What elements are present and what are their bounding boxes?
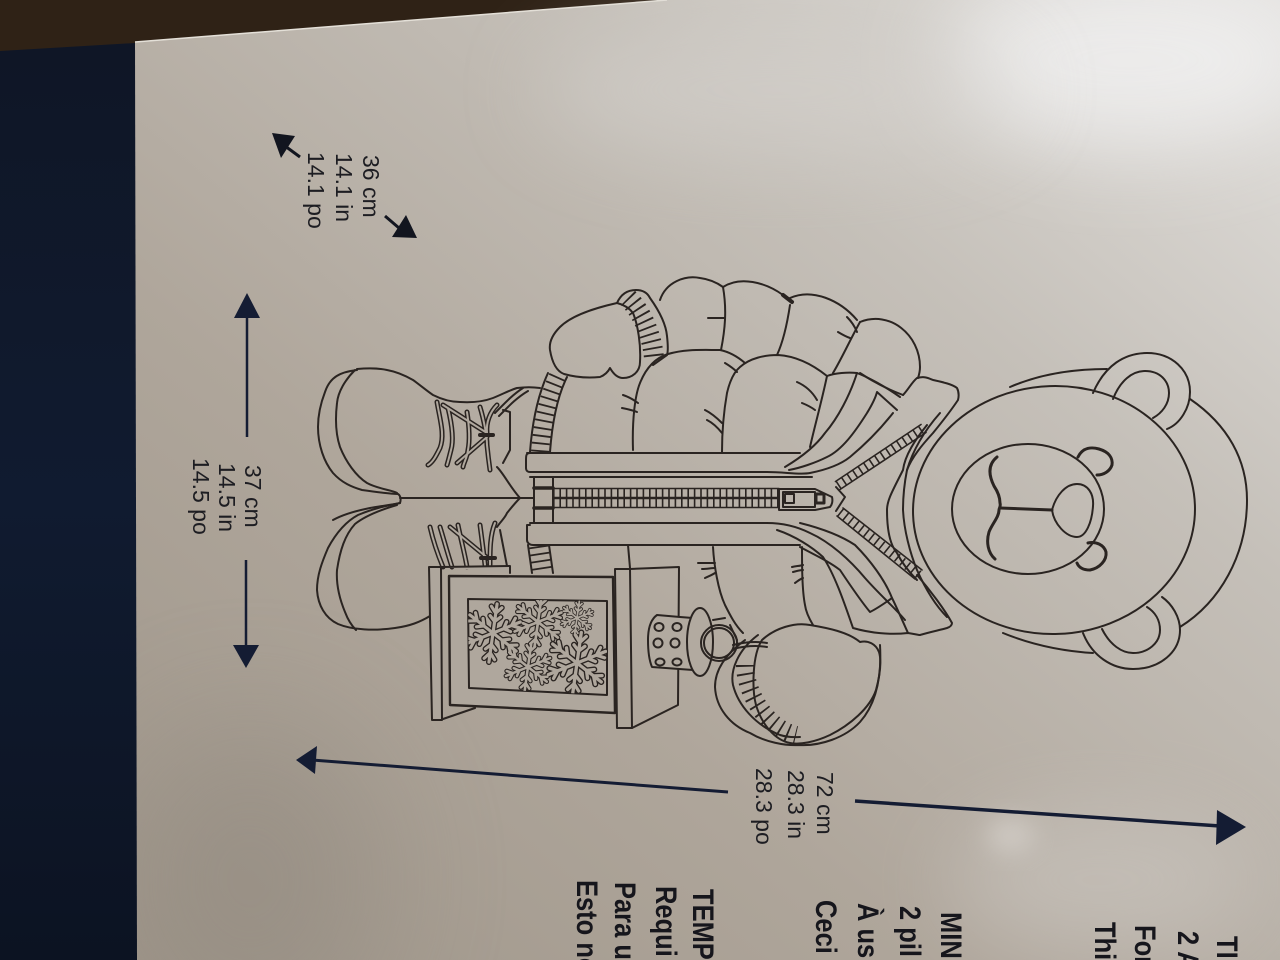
waist ribbing [528, 373, 567, 573]
arrow: depth upper-left [272, 133, 300, 158]
arrow: depth lower-right [385, 215, 417, 238]
lantern ring [701, 618, 767, 661]
photo background: brown surface above the box [0, 0, 1280, 60]
arm and mitten: lower, holding lantern [715, 624, 880, 745]
depth label: 14.1 in [331, 153, 357, 222]
bear figure line drawing [317, 277, 1247, 745]
upper [357, 368, 540, 402]
width label [188, 458, 266, 535]
nose [1052, 484, 1093, 537]
instruction line: 2 pil [894, 906, 927, 957]
arrow: height right [855, 801, 1246, 845]
depth label: 36 cm [358, 155, 384, 218]
instruction line: Ceci [810, 900, 843, 954]
eye: lower [1077, 542, 1106, 570]
cuff: upper mitten ribbing [617, 290, 668, 365]
boot: lower [317, 498, 520, 630]
lantern cap holes [654, 623, 682, 666]
bold instruction text, cut off by bottom edge: battery section [1089, 922, 1244, 960]
eye: upper [1078, 448, 1112, 475]
height label: 28.3 po [751, 768, 777, 845]
ear: upper [1093, 353, 1190, 429]
lantern window [468, 599, 607, 695]
height label [751, 768, 838, 845]
depth label: 14.1 po [303, 152, 329, 229]
boot: upper [318, 368, 540, 520]
head [909, 381, 1199, 639]
lantern right post [615, 569, 632, 728]
jacket collar, lapels and scarf [767, 373, 959, 635]
zipper slider [779, 487, 845, 511]
zipper front bands [526, 453, 812, 545]
width label: 14.5 in [214, 463, 240, 532]
ear: lower [1083, 597, 1180, 669]
instruction line: TEMP [687, 889, 720, 960]
bear head with hood and ears [909, 353, 1247, 669]
puffer jacket torso panels [622, 350, 827, 633]
arrow: width top [234, 293, 260, 437]
muzzle [952, 444, 1104, 574]
width label: 14.5 po [188, 458, 214, 535]
instruction line: MIN [935, 912, 968, 959]
lantern main frame [449, 576, 615, 713]
dimension: height arrow and label [296, 746, 1246, 845]
height label: 72 cm [812, 772, 838, 835]
lantern [429, 566, 767, 728]
dimension: depth arrows and label [272, 133, 417, 238]
puffer jacket upper arm [660, 277, 920, 378]
laces: lower boot [430, 523, 495, 567]
bold instruction text: minimum batteries section [810, 900, 968, 959]
snowflakes in lantern window [468, 600, 607, 694]
hood [1003, 369, 1247, 653]
arrow: height left [296, 746, 728, 792]
mouth [1000, 508, 1052, 510]
depth label [303, 152, 384, 229]
tongue [495, 388, 528, 498]
arrow: width bottom [233, 560, 259, 668]
dimension: width arrow and label [188, 293, 266, 668]
laces: upper boot [428, 402, 497, 470]
instruction line: Para u [609, 882, 642, 960]
bold instruction text: temperature section [571, 880, 720, 960]
instruction line: À us [852, 903, 885, 958]
navy side panel of the box [0, 43, 137, 960]
mitten: lower [754, 624, 880, 744]
cuff: lower ribbing [732, 635, 800, 737]
instruction line: Requi [650, 886, 683, 957]
height label: 28.3 in [783, 770, 809, 839]
width label: 37 cm [240, 465, 266, 528]
sole [318, 370, 401, 520]
lantern left post [429, 566, 510, 720]
zipper teeth [553, 424, 926, 579]
mitten: upper [550, 303, 640, 378]
instruction line: Thi [1089, 922, 1122, 960]
lantern flange [687, 608, 713, 676]
lantern cap [648, 615, 693, 670]
lantern side face [630, 567, 679, 728]
